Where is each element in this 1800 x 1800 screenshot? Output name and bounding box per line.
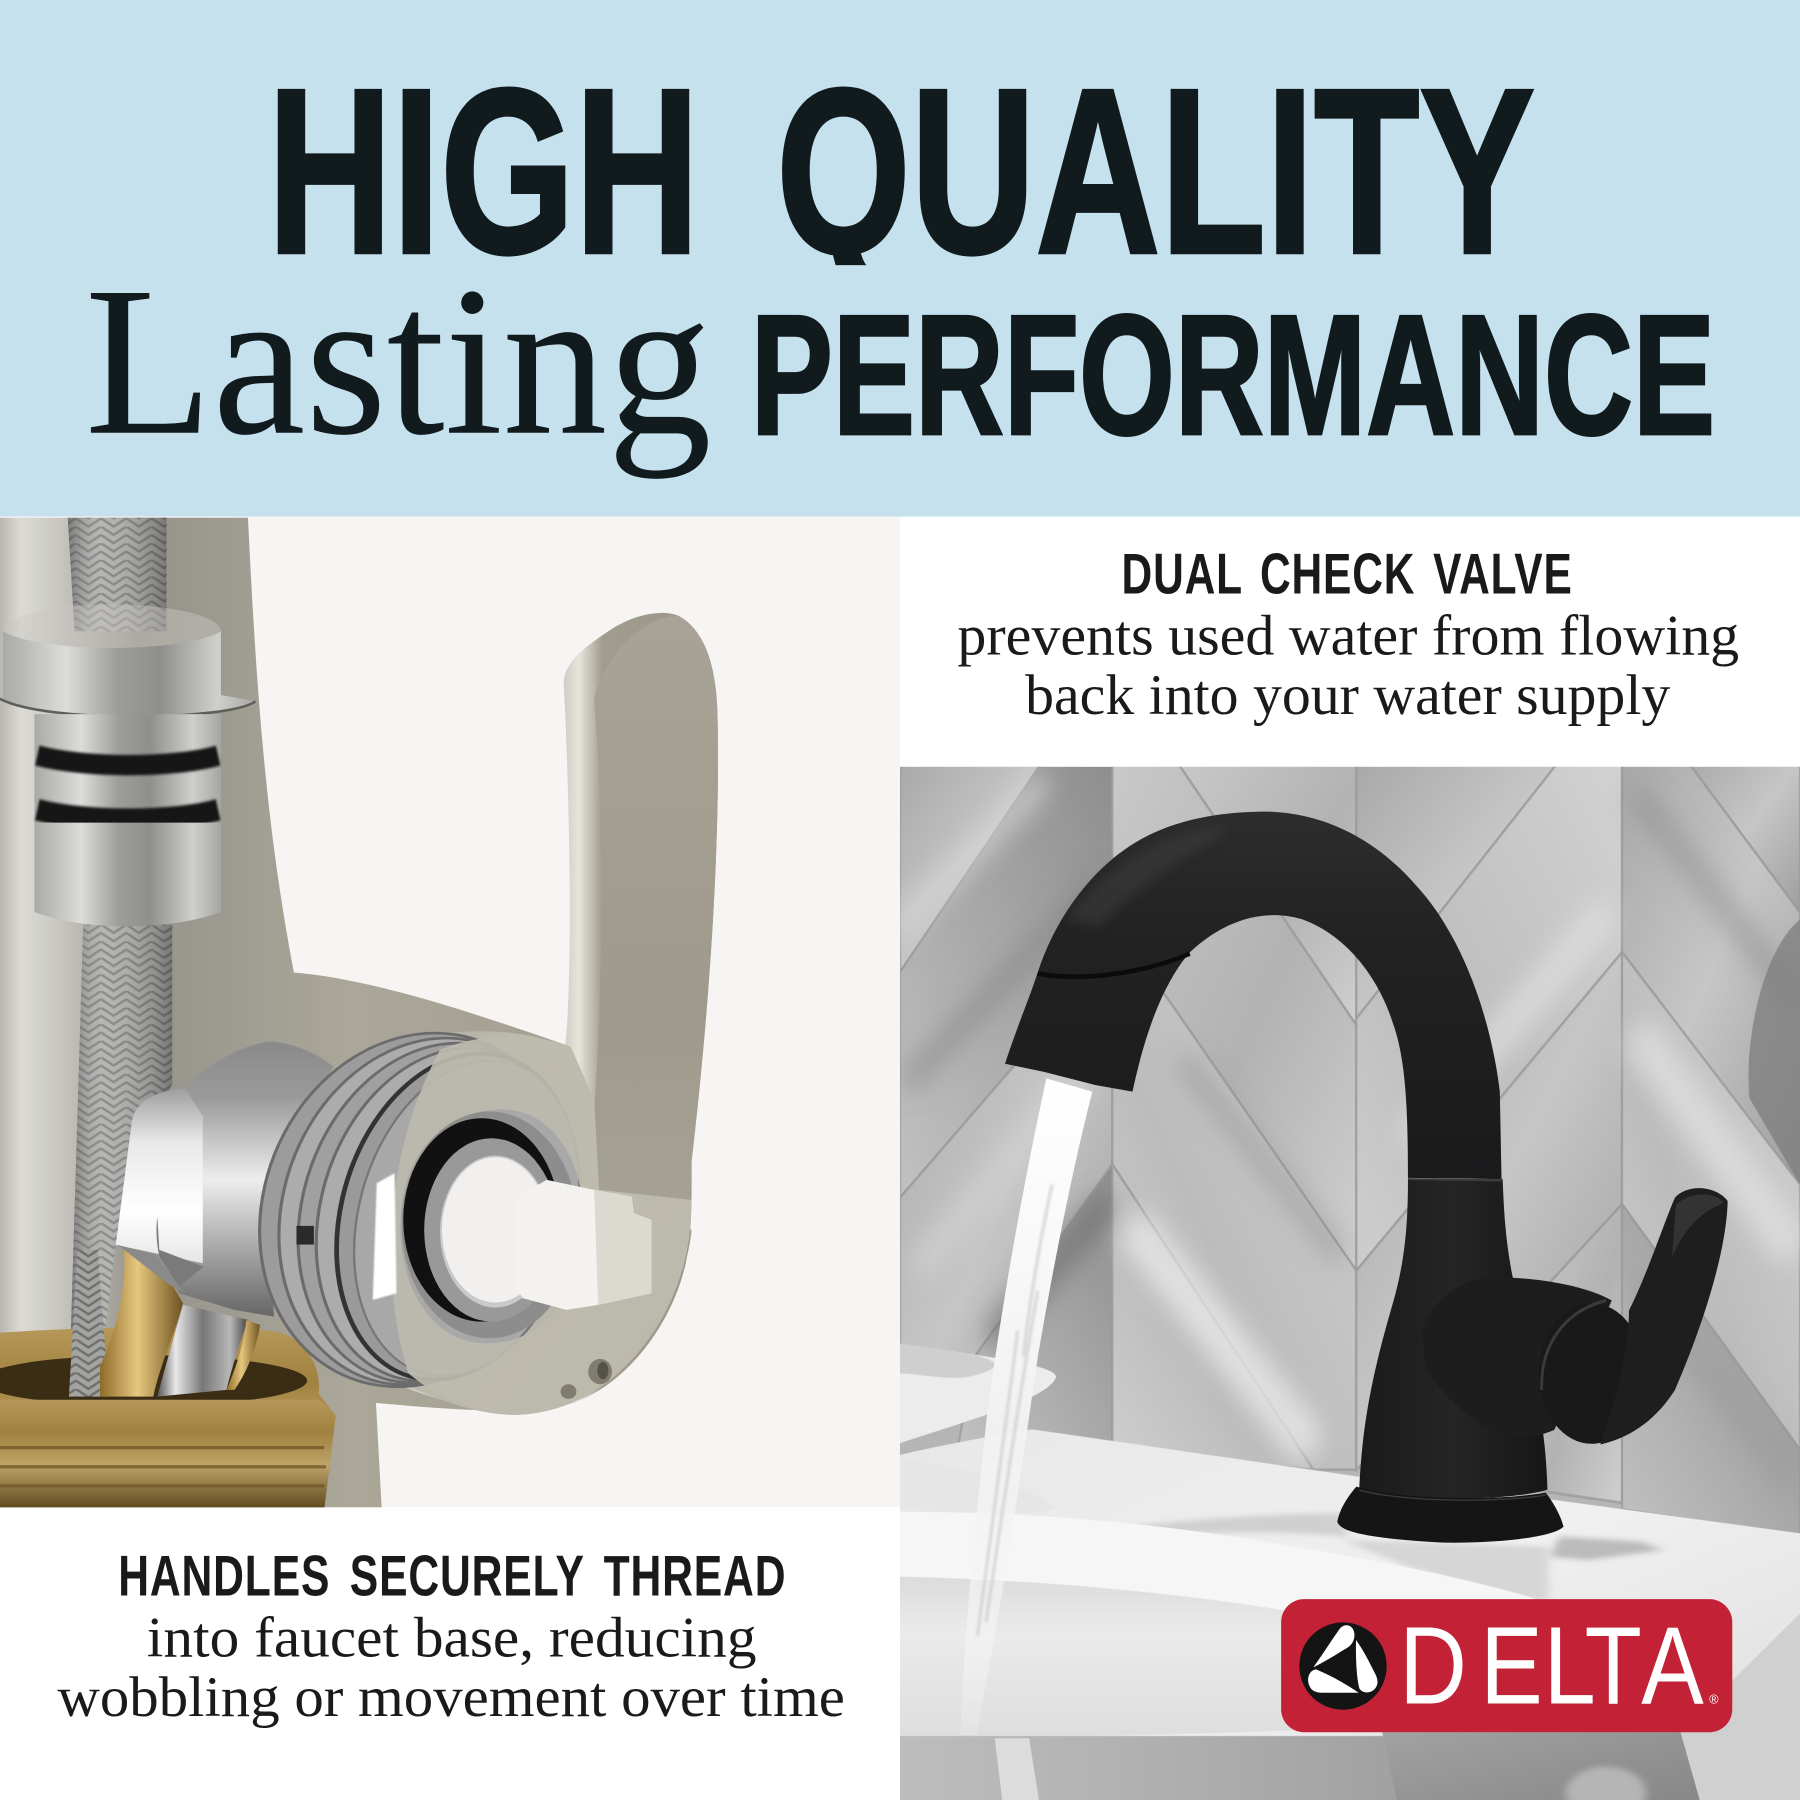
panel: header banner bbox=[0, 0, 1800, 517]
banner background bbox=[0, 0, 1800, 517]
right counter wedge bbox=[1681, 1613, 1800, 1800]
spout bbox=[1005, 812, 1502, 1179]
spout sheen bbox=[1066, 826, 1225, 926]
small brass tube bbox=[227, 1320, 260, 1390]
wall shadow bbox=[1748, 919, 1800, 1184]
nose overlay ring bbox=[391, 1037, 691, 1415]
plate bbox=[900, 1344, 1056, 1443]
upper collar bbox=[0, 604, 255, 717]
silver supply tube bbox=[157, 1305, 248, 1397]
pull-down seam bbox=[1038, 954, 1190, 977]
base body bbox=[1359, 1179, 1547, 1499]
faucet reflection bbox=[1549, 1537, 1663, 1560]
drain highlight bbox=[1566, 1767, 1646, 1800]
o-ring section bbox=[34, 714, 221, 826]
heading: lasting: Lasting bbox=[85, 244, 712, 480]
handle lever bbox=[396, 613, 718, 1410]
caption line 1: prevents used water from flowing bbox=[957, 604, 1739, 667]
handle lever bbox=[1600, 1188, 1728, 1444]
thread notch bbox=[296, 1226, 314, 1245]
chrome highlight bbox=[373, 1173, 397, 1300]
chevron marble wall bbox=[900, 760, 1800, 1556]
panel background bbox=[0, 517, 900, 1507]
body cylinder bbox=[159, 1042, 333, 1317]
icon: delta triangle bbox=[1299, 1622, 1387, 1710]
caption line 1: into faucet base, reducing bbox=[147, 1607, 757, 1670]
spout seam bbox=[1408, 1179, 1503, 1180]
registered mark: ® bbox=[1709, 1693, 1719, 1707]
brass supply tube bbox=[100, 1250, 183, 1397]
lower sleeve bbox=[34, 823, 221, 926]
caption heading: HANDLES SECURELY THREAD bbox=[118, 1545, 786, 1609]
lower hose passing through base bbox=[69, 1250, 109, 1397]
caption line 2: back into your water supply bbox=[1025, 664, 1671, 727]
basin floor bbox=[900, 1736, 1417, 1800]
brass base ring bbox=[0, 1327, 336, 1508]
marble veining bbox=[900, 786, 1790, 1470]
handle drain holes bbox=[561, 1359, 612, 1399]
panel: handle cutaway illustration bbox=[0, 517, 900, 1508]
water stream bbox=[960, 1078, 1092, 1800]
handle hub bbox=[1422, 1277, 1612, 1438]
caption line 2: wobbling or movement over time bbox=[57, 1666, 845, 1729]
logo wordmark: DELTA bbox=[1399, 1603, 1704, 1727]
faucet flange bbox=[1337, 1487, 1564, 1543]
caption heading: DUAL CHECK VALVE bbox=[1122, 542, 1573, 606]
basin bowl bbox=[900, 1577, 1417, 1736]
handle nose bbox=[411, 1031, 597, 1415]
counter shadow bbox=[1130, 1513, 1348, 1537]
counter top bbox=[900, 1429, 1800, 1800]
handle ball bbox=[1539, 1303, 1644, 1444]
panel: valve caption bbox=[957, 542, 1739, 727]
panel: handles caption bbox=[57, 1545, 845, 1729]
logo background bbox=[1281, 1599, 1732, 1732]
white valve stem bbox=[442, 1157, 652, 1310]
screw threads bbox=[258, 1032, 580, 1388]
braided hose bbox=[68, 518, 172, 1397]
black faucet bbox=[1005, 812, 1728, 1499]
faucet body bbox=[0, 518, 692, 1508]
basin rim bbox=[900, 1512, 1534, 1633]
hex nut bbox=[116, 1088, 204, 1293]
panel: black faucet photo scene bbox=[900, 760, 1800, 1800]
soap dish recess bbox=[900, 1460, 1055, 1514]
handle seam bbox=[1542, 1301, 1606, 1390]
threaded mechanism detail bbox=[100, 1010, 691, 1415]
cartridge opening rings bbox=[402, 1112, 577, 1338]
sink bbox=[900, 1429, 1800, 1800]
logo: Delta badge bbox=[1281, 1599, 1732, 1732]
drain tube reflection bbox=[1382, 1732, 1704, 1800]
